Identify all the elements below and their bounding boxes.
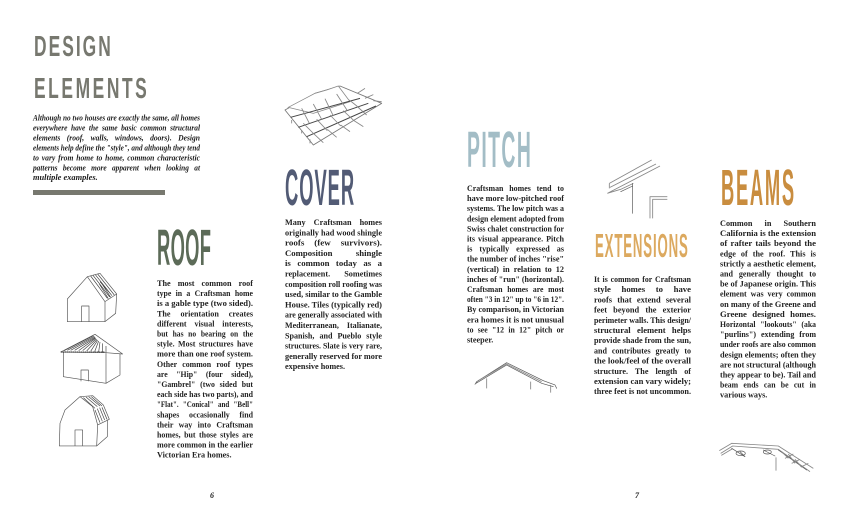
- title underline bar: [33, 190, 165, 195]
- panel: page title and introduction: [32, 31, 201, 195]
- beams text block: on many of the Greene and: [720, 300, 816, 309]
- pitch text block: systems. The low pitch was a: [467, 204, 564, 213]
- pitch text block: (vertical) in relation to 12: [467, 265, 564, 274]
- roof text block: are "Hip" (four sided),: [157, 370, 253, 379]
- beams text block: strictly a aesthetic element,: [720, 259, 816, 268]
- roof text block: but has no bearing on the: [157, 330, 253, 338]
- extensions text block: It is common for Craftsman: [594, 275, 691, 284]
- intro text block: multiple examples.: [33, 173, 98, 182]
- roof text block: more common in the earlier: [157, 441, 253, 450]
- extensions text block: and contributes greatly to: [594, 346, 691, 355]
- beams text block: Greene designed homes.: [720, 310, 816, 319]
- icon: roof extension detail: [607, 160, 667, 218]
- extensions text block: provide shade from the sun,: [594, 336, 691, 345]
- panel: roof: [59, 220, 253, 460]
- roof text block: is a gable type (two sided).: [157, 299, 253, 308]
- heading: Beams: BEAMS: [721, 160, 794, 217]
- pitch text block: steeper.: [467, 336, 493, 344]
- cover text block: Mediterranean, Italianate,: [285, 321, 382, 330]
- pitch text block: to see "12 in 12" pitch or: [467, 325, 564, 334]
- beams text block: Common in Southern: [720, 219, 816, 228]
- roof text block: shapes occasionally find: [157, 410, 253, 419]
- roof text block: their way into Craftsman: [157, 420, 253, 429]
- roof text block: homes, but those styles are: [157, 430, 253, 440]
- beams text block: "purlins") extending from: [720, 330, 816, 339]
- beams text block: beam ends can be cut in: [720, 381, 816, 390]
- extensions text block: feet beyond the exterior: [594, 306, 691, 315]
- page number 7: 7: [635, 491, 640, 500]
- panel: beams: [719, 160, 817, 472]
- beams text block: [720, 219, 817, 400]
- cover text block: generally reserved for more: [285, 352, 382, 361]
- roof text block: [157, 279, 253, 460]
- pitch text block: design element adopted from: [467, 214, 564, 223]
- roof text block: "Gambrel" (two sided but: [157, 380, 253, 389]
- cover text block: [285, 218, 382, 371]
- cover text block: structures. Slate is very rare,: [285, 342, 382, 351]
- beams text block: be of Japanese origin. This: [720, 280, 816, 289]
- extensions text block: the look/feel of the overall: [594, 357, 692, 366]
- page number 6: 6: [210, 491, 214, 500]
- roof text block: each side has two parts), and: [157, 390, 253, 399]
- pitch text block: the number of inches "rise": [467, 255, 564, 264]
- intro text block: Although no two houses are exactly the same, all homes: [32, 114, 200, 122]
- pitch text block: its visual appearance. Pitch: [467, 234, 564, 244]
- intro text block: elements help define the "style", and although they tend: [33, 144, 201, 152]
- cover text block: are generally associated with: [285, 311, 382, 320]
- extensions text block: structure. The length of: [594, 367, 691, 376]
- extensions text block: roofs that extend several: [594, 295, 692, 304]
- pitch text block: often "3 in 12" up to "6 in 12".: [467, 295, 564, 304]
- beams text block: various ways.: [720, 391, 767, 400]
- icon: hip roof house: [61, 334, 123, 383]
- pitch text block: [467, 184, 565, 344]
- heading: Pitch: PITCH: [467, 122, 531, 179]
- icon: low pitch roof: [475, 363, 557, 393]
- extensions text block: [594, 275, 692, 396]
- cover text block: originally had wood shingle: [285, 228, 382, 237]
- intro text block: [32, 114, 201, 182]
- cover text block: expensive homes.: [285, 362, 345, 371]
- cover text block: used, similar to the Gamble: [285, 290, 382, 299]
- extensions text block: three feet is not uncommon.: [594, 387, 691, 396]
- beams text block: element was very common: [720, 290, 816, 299]
- pitch text block: By comparison, in Victorian: [467, 305, 564, 314]
- intro text block: elements (roof, walls, windows, doors). Design: [33, 134, 200, 142]
- extensions text block: perimeter walls. This design/: [594, 316, 692, 325]
- extensions text block: structural element helps: [594, 326, 691, 335]
- panel: pitch: [467, 122, 565, 393]
- pitch text block: era homes it is not unusual: [467, 315, 565, 324]
- heading: Extensions: EXTENSIONS: [595, 228, 688, 265]
- roof text block: "Flat". "Conical" and "Bell": [157, 400, 253, 409]
- pitch text block: have more low-pitched roof: [467, 194, 564, 203]
- roof text block: The most common roof: [157, 279, 253, 288]
- beams text block: design elements; often they: [720, 350, 817, 359]
- cover text block: composition roll roofing was: [285, 280, 382, 289]
- roof text block: different visual interests,: [157, 319, 253, 328]
- beams text block: are not structural (although: [720, 360, 816, 369]
- cover text block: replacement. Sometimes: [285, 270, 382, 278]
- pitch text block: inches of "run" (horizontal).: [467, 275, 564, 284]
- beams text block: Horizontal "lookouts" (aka: [720, 320, 816, 329]
- cover text block: House. Tiles (typically red): [285, 300, 382, 309]
- intro text block: to vary from home to home, common characteristic: [33, 154, 200, 162]
- beams text block: under roofs are also common: [720, 340, 816, 349]
- title: Design Elements: ELEMENTS: [34, 73, 147, 105]
- icon: gable roof house: [67, 273, 117, 322]
- pitch text block: Swiss chalet construction for: [467, 224, 564, 233]
- cover text block: Many Craftsman homes: [285, 218, 382, 227]
- roof text block: Victorian Era homes.: [157, 451, 232, 460]
- roof text block: type in a Craftsman home: [157, 289, 253, 298]
- beams text block: and generally thought to: [720, 270, 816, 278]
- panel: cover: [285, 86, 382, 371]
- extensions text block: extension can vary widely;: [594, 377, 691, 386]
- pitch text block: Craftsman homes tend to: [467, 184, 564, 193]
- icon: roof shingles: [285, 86, 382, 145]
- roof text block: The orientation creates: [157, 309, 253, 318]
- roof text block: Other common roof types: [157, 360, 253, 369]
- pitch text block: is typically expressed as: [467, 245, 564, 254]
- roof text block: style. Most structures have: [157, 340, 253, 349]
- cover text block: Spanish, and Pueblo style: [285, 331, 382, 340]
- beams text block: of rafter tails beyond the: [720, 239, 816, 248]
- beams text block: edge of the roof. This is: [720, 249, 816, 258]
- intro text block: everywhere have the same basic common structural: [33, 124, 201, 132]
- title: Design Elements: [34, 31, 147, 105]
- roof text block: more than one roof system.: [157, 350, 253, 359]
- icon: gambrel roof house: [59, 396, 109, 446]
- heading: Cover: COVER: [285, 160, 354, 217]
- extensions text block: style homes to have: [594, 285, 691, 294]
- beams text block: they appear to be). Tail and: [720, 370, 816, 380]
- cover text block: Composition shingle: [285, 249, 382, 258]
- panel: extensions: [594, 160, 692, 396]
- icon: beam and rafter tails: [719, 443, 813, 472]
- title: Design Elements: DESIGN: [34, 31, 111, 63]
- beams text block: California is the extension: [720, 229, 816, 238]
- cover text block: is common today as a: [285, 259, 382, 268]
- intro text block: patterns become more apparent when looking at: [32, 164, 201, 172]
- cover text block: roofs (few survivors).: [285, 239, 382, 248]
- pitch text block: Craftsman homes are most: [467, 285, 564, 294]
- heading: Roof: ROOF: [157, 220, 211, 277]
